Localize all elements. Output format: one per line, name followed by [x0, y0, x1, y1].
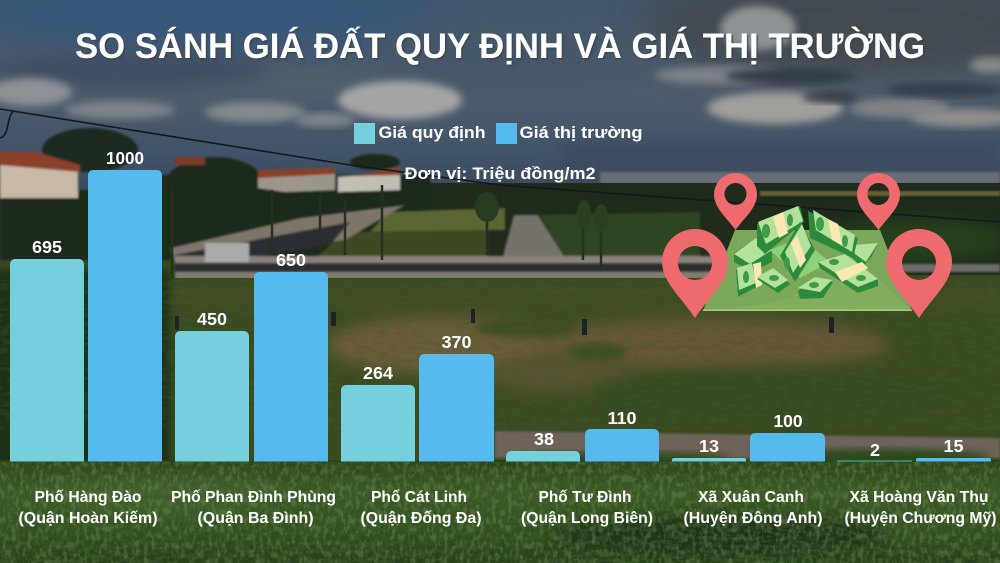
- bundle G: [736, 262, 758, 297]
- skyline: [600, 172, 1000, 184]
- bundle E: [853, 243, 878, 268]
- group: Phố Cát Linh: (Quận Đống Đa): [360, 510, 482, 527]
- legend: giá quy định: Giá quy định: [378, 123, 486, 142]
- group: Xã Hoàng Văn Thụ: (Huyện Chương Mỹ): [844, 510, 996, 527]
- group: Phố Tư Đình: Phố Tư Đình: [538, 489, 632, 506]
- grass plots, paving and road in the middle ground: [170, 205, 1000, 279]
- power line: [0, 109, 1000, 222]
- group: Phố Phan Đình Phùng: Phố Phan Đình Phùng: [171, 489, 336, 506]
- land plot: [703, 230, 912, 311]
- left trees and houses: [0, 128, 430, 260]
- group: Xã Hoàng Văn Thụ: Xã Hoàng Văn Thụ: [850, 489, 988, 506]
- young trees along the road: [172, 185, 601, 300]
- group: Phố Hàng Đào: (Quận Hoàn Kiếm): [18, 510, 158, 527]
- illustration: money on land with location pins: [662, 173, 952, 318]
- group: Xã Xuân Canh: Xã Xuân Canh: [698, 489, 804, 506]
- group: Phố Phan Đình Phùng: [171, 250, 336, 527]
- group: Phố Cát Linh: [341, 332, 494, 527]
- bundle I: [798, 277, 833, 299]
- legend: [354, 123, 642, 144]
- group: Phố Cát Linh: Phố Cát Linh: [371, 489, 467, 506]
- group: Xã Xuân Canh: 13: [699, 436, 719, 456]
- group: Phố Hàng Đào: [10, 148, 162, 527]
- group: Xã Xuân Canh: (Huyện Đông Anh): [684, 510, 822, 527]
- group: Xã Hoàng Văn Thụ: 15: [944, 436, 964, 456]
- pin: large left: [662, 229, 728, 318]
- bundle middle: [770, 238, 830, 278]
- bundle H: [757, 268, 790, 293]
- money pile: [734, 206, 878, 299]
- bundle F: [818, 254, 878, 293]
- foreground grass: [0, 460, 1000, 563]
- group: Phố Tư Đình: (Quận Long Biên): [521, 510, 653, 527]
- bundle B: [757, 206, 804, 254]
- concrete strip: [495, 431, 1000, 458]
- far tree line: [400, 183, 1000, 275]
- legend: giá thị trường: Giá thị trường: [520, 123, 642, 142]
- bundle D: [808, 211, 858, 258]
- group: Phố Hàng Đào: Phố Hàng Đào: [34, 489, 142, 506]
- group: Phố Phan Đình Phùng: 650: [276, 250, 306, 270]
- group: Phố Tư Đình: [506, 408, 659, 527]
- pin: small right: [857, 173, 900, 230]
- people on the field: [175, 309, 834, 335]
- group: Xã Hoàng Văn Thụ: 2: [870, 440, 880, 460]
- unit note: Đơn vị: Triệu đồng/m2: [404, 164, 596, 183]
- group: Phố Tư Đình: 38: [534, 429, 554, 449]
- group: Phố Phan Đình Phùng: (Quận Ba Đình): [198, 510, 314, 527]
- group: Phố Hàng Đào: 1000: [106, 148, 144, 168]
- bundle A: [734, 238, 772, 272]
- group: Xã Xuân Canh: [672, 411, 825, 527]
- pin: large right: [886, 229, 952, 318]
- group: Phố Hàng Đào: 695: [32, 237, 62, 257]
- group: Xã Xuân Canh: 100: [774, 411, 803, 431]
- pin: small left: [714, 173, 757, 230]
- sports field: [0, 278, 1000, 438]
- group: Xã Hoàng Văn Thụ: [837, 436, 996, 527]
- group: Phố Cát Linh: 264: [363, 363, 393, 383]
- group: Phố Cát Linh: 370: [442, 332, 472, 352]
- bundle C: [780, 222, 815, 282]
- title: SO SÁNH GIÁ ĐẤT QUY ĐỊNH VÀ GIÁ THỊ TRƯỜNG: [75, 26, 925, 66]
- bar chart: [10, 148, 996, 527]
- group: Phố Phan Đình Phùng: 450: [197, 309, 227, 329]
- group: Phố Tư Đình: 110: [608, 408, 637, 428]
